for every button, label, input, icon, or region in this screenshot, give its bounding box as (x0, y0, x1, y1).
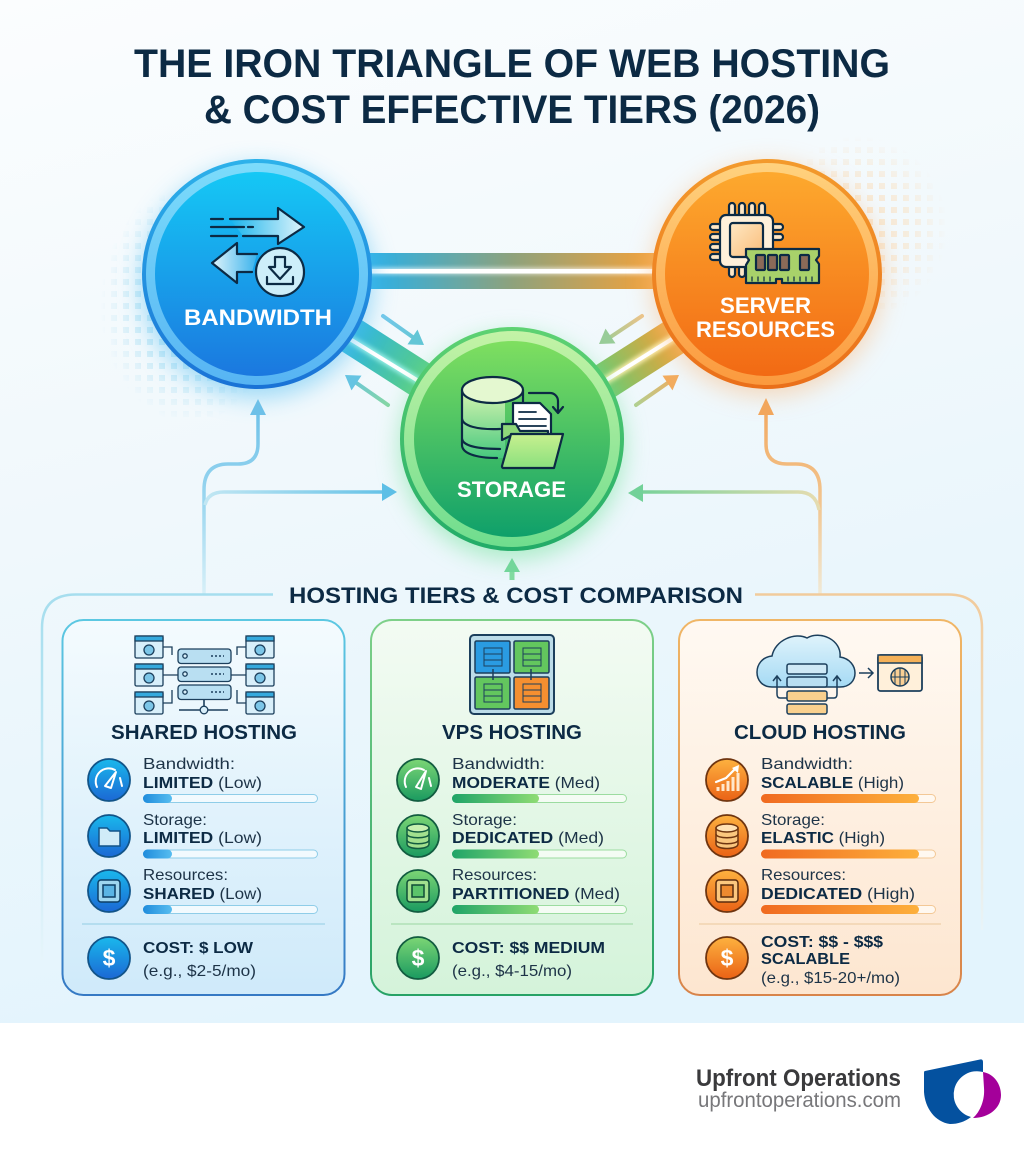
label: server resources (696, 293, 835, 342)
row: bandwidth limited (88, 756, 318, 803)
connector: server resources to storage (590, 327, 690, 391)
icon: brand logo (924, 1059, 1001, 1124)
icon: database and folder (462, 377, 563, 468)
row: storage dedicated: Storage: (452, 812, 517, 829)
row: bandwidth moderate (397, 756, 626, 803)
arrow: server resources to storage (599, 316, 642, 344)
row: bandwidth limited: LIMITED (Low) (143, 775, 262, 792)
panel: shared hosting (62, 620, 344, 995)
row: storage limited (88, 812, 318, 858)
footer brand: Upfront Operations (696, 1065, 901, 1092)
cost: vps hosting: COST: $$ MEDIUM (452, 940, 605, 957)
row: bandwidth moderate: Bandwidth: (452, 756, 545, 773)
row: storage dedicated (397, 812, 626, 858)
flow line: shared tier to bandwidth (204, 399, 266, 595)
arrow: storage to bandwidth (345, 375, 388, 405)
panel: vps hosting (371, 620, 653, 995)
row: resources shared: Resources: (143, 867, 228, 884)
icon: partitioned server (470, 635, 554, 714)
row: storage elastic (706, 812, 936, 858)
divider (699, 923, 941, 925)
arrow: bandwidth to storage (383, 316, 424, 345)
row: storage dedicated: DEDICATED (Med) (452, 830, 604, 847)
outer frame right (755, 594, 982, 930)
row: bandwidth scalable: Bandwidth: (761, 756, 853, 773)
row: bandwidth scalable (706, 756, 936, 803)
row: resources partitioned: PARTITIONED (Med) (452, 886, 620, 903)
panel: cloud hosting (679, 620, 961, 995)
cost: shared hosting (88, 937, 256, 980)
cost: vps hosting: $ (412, 945, 425, 971)
icon: shared server with sites (135, 636, 274, 714)
row: storage limited: Storage: (143, 812, 207, 829)
cost: shared hosting: $ (103, 945, 116, 971)
row: resources dedicated: DEDICATED (High) (761, 886, 915, 903)
icon: processor and memory (710, 203, 819, 283)
outer frame left (42, 594, 273, 960)
row: resources shared (88, 867, 318, 914)
circle: storage (400, 327, 624, 551)
heading: shared hosting: SHARED HOSTING (111, 722, 297, 744)
arrow: tiers to storage (504, 558, 520, 580)
label: server resources: RESOURCES (696, 317, 835, 342)
label: storage: STORAGE (457, 477, 566, 502)
row: storage limited: LIMITED (Low) (143, 830, 262, 847)
glow behind circles (141, 164, 883, 559)
row: bandwidth scalable: SCALABLE (High) (761, 775, 904, 792)
arrow: storage to server resources (636, 375, 679, 405)
title: & COST EFFECTIVE TIERS (2026) (204, 88, 820, 132)
flow line: cloud tier to storage (628, 484, 819, 510)
row: storage elastic: Storage: (761, 812, 825, 829)
row: resources dedicated (706, 867, 936, 914)
icon: bandwidth arrows (211, 208, 304, 296)
label: bandwidth: BANDWIDTH (184, 305, 332, 330)
row: resources partitioned (397, 867, 626, 914)
cost: cloud hosting: $ (721, 945, 734, 971)
footer brand: upfrontoperations.com (698, 1089, 901, 1112)
circle: server resources (652, 159, 882, 389)
flow line: cloud tier to server resources (758, 398, 820, 595)
row: bandwidth moderate: MODERATE (Med) (452, 775, 600, 792)
icon: cloud servers and site (757, 635, 922, 714)
cost: shared hosting: (e.g., $2-5/mo) (143, 963, 256, 980)
divider (82, 923, 325, 925)
halftone dots right (810, 147, 933, 297)
divider (391, 923, 633, 925)
label: server resources: SERVER (720, 293, 811, 318)
circle: bandwidth (142, 159, 372, 389)
connector: bandwidth to server resources (360, 253, 665, 289)
cost: vps hosting: (e.g., $4-15/mo) (452, 963, 572, 980)
halftone dots left (111, 207, 232, 412)
cost: cloud hosting: COST: $$ - $$$ (761, 934, 883, 951)
title: THE IRON TRIANGLE OF WEB HOSTING (134, 42, 890, 86)
section heading: HOSTING TIERS & COST COMPARISON (289, 583, 743, 608)
flow line: shared tier to storage (205, 483, 397, 505)
title (134, 42, 890, 132)
footer brand (696, 1059, 1001, 1124)
heading: vps hosting: VPS HOSTING (442, 722, 582, 744)
connector: bandwidth to storage (335, 325, 435, 389)
cost: cloud hosting: SCALABLE (761, 951, 850, 968)
row: resources partitioned: Resources: (452, 867, 537, 884)
row: resources shared: SHARED (Low) (143, 886, 262, 903)
heading: cloud hosting: CLOUD HOSTING (734, 722, 906, 744)
cost: cloud hosting: (e.g., $15-20+/mo) (761, 970, 900, 987)
cost: shared hosting: COST: $ LOW (143, 940, 254, 957)
row: storage elastic: ELASTIC (High) (761, 830, 885, 847)
row: bandwidth limited: Bandwidth: (143, 756, 235, 773)
cost: vps hosting (397, 937, 605, 980)
cost: cloud hosting (706, 934, 900, 987)
row: resources dedicated: Resources: (761, 867, 846, 884)
